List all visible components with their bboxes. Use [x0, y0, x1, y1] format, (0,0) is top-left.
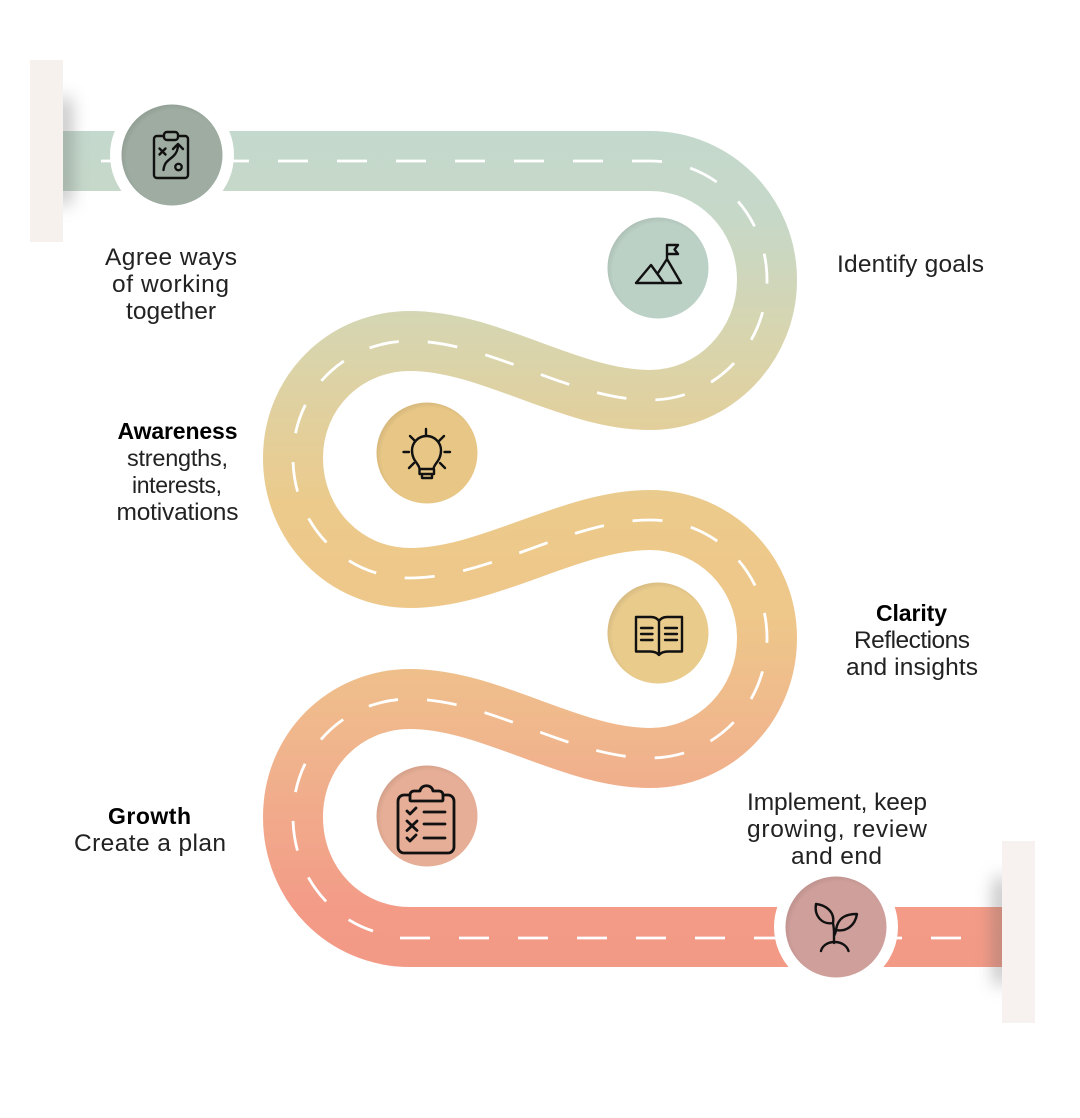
step 4: book: [608, 582, 708, 684]
end post shadow: [995, 878, 1009, 984]
icon: open book: [636, 617, 682, 655]
label: awareness: interests,: [132, 472, 222, 498]
step 3: lightbulb: [376, 402, 478, 504]
label: agree ways of working together: of working: [112, 271, 229, 298]
icon: mountain flag: [636, 245, 681, 283]
step 5: checklist: [376, 766, 478, 866]
step 1: agree ways of working: [110, 93, 234, 217]
label: awareness: motivations: [116, 499, 238, 526]
label: awareness: [116, 418, 238, 526]
label: agree ways of working together: [105, 244, 237, 325]
step 2: identify goals: [608, 218, 708, 318]
label: growth: Growth: [108, 803, 191, 829]
label: awareness: strengths,: [127, 445, 228, 471]
start post: [30, 60, 63, 242]
step 6: sprout: [774, 865, 898, 989]
icon: checklist clipboard: [398, 786, 454, 853]
icon: strategy clipboard: [154, 132, 188, 178]
label: clarity: [846, 600, 978, 681]
label: growth: [74, 803, 226, 857]
icon: sprout: [816, 904, 857, 951]
winding road: [63, 161, 1002, 938]
start post shadow: [56, 98, 70, 204]
label: clarity: Reflections: [854, 627, 970, 654]
label: implement, keep growing, review and end: and end: [791, 843, 882, 870]
label: implement, keep growing, review and end: Implement, keep: [747, 789, 927, 816]
end post: [1002, 841, 1035, 1023]
label: agree ways of working together: together: [126, 298, 216, 325]
label: awareness: Awareness: [118, 418, 238, 444]
label: implement, keep growing, review and end: growing, review: [747, 816, 927, 843]
label: agree ways of working together: Agree ways: [105, 244, 237, 271]
label: clarity: and insights: [846, 654, 978, 681]
label: implement, keep growing, review and end: [747, 789, 927, 870]
icon: lightbulb: [404, 429, 450, 478]
label: growth: Create a plan: [74, 830, 226, 857]
label: clarity: Clarity: [876, 600, 947, 626]
label: identify goals: Identify goals: [837, 251, 984, 278]
